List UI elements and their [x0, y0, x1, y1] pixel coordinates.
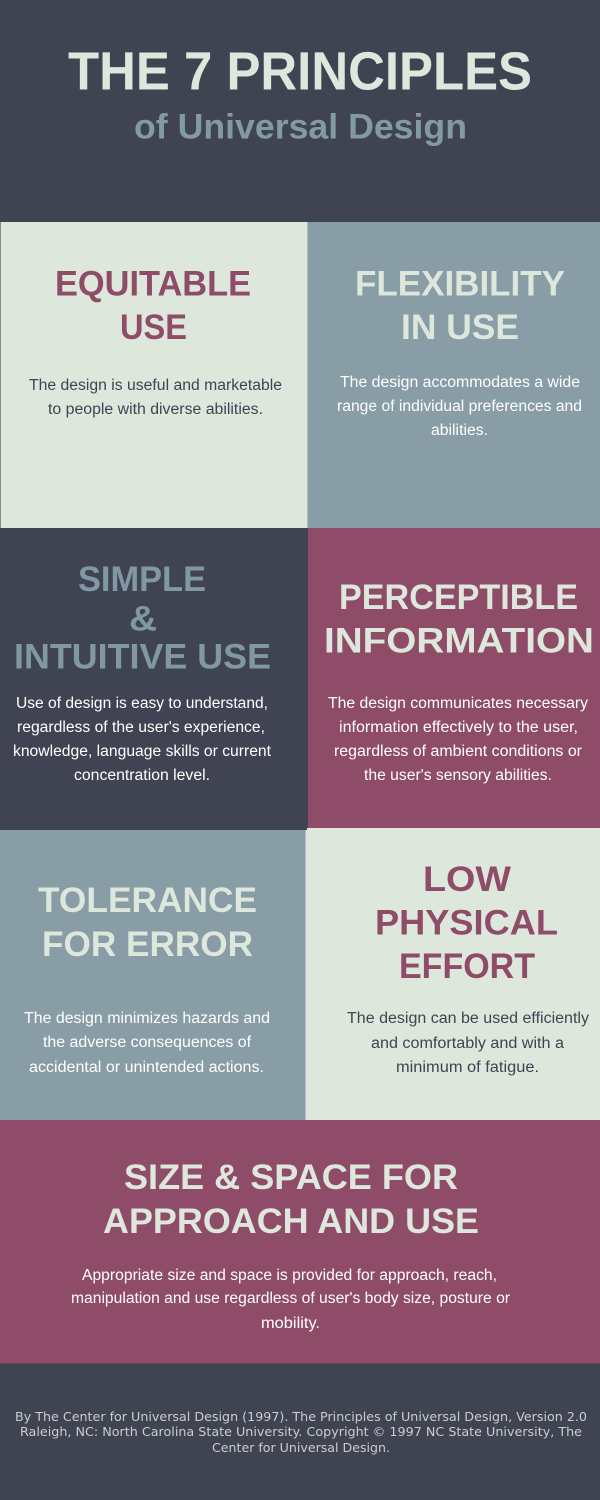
description: perceptible information: regardless of ambient conditions or	[334, 743, 582, 760]
description: size and space for approach and use: Appropriate size and space is provided for approach, reach,	[82, 1267, 497, 1284]
heading: simple and intuitive use: INTUITIVE USE	[14, 636, 271, 676]
heading: equitable use: EQUITABLE	[55, 264, 251, 304]
heading: flexibility in use: IN USE	[401, 307, 519, 347]
description: perceptible information: the user's sensory abilities.	[364, 767, 552, 784]
description: flexibility in use: abilities.	[431, 422, 488, 439]
description: simple and intuitive use: regardless of the user's experience,	[17, 719, 265, 736]
heading: tolerance for error	[38, 880, 257, 964]
heading: simple and intuitive use: SIMPLE	[78, 559, 206, 599]
heading: low physical effort	[375, 859, 558, 986]
description: tolerance for error: the adverse consequences of	[43, 1034, 252, 1051]
heading: flexibility in use: FLEXIBILITY	[355, 264, 565, 304]
panel: tolerance for error	[0, 830, 306, 1120]
description: tolerance for error: The design minimizes hazards and	[24, 1010, 270, 1027]
description: low physical effort: The design can be used efficiently	[347, 1010, 589, 1027]
description: simple and intuitive use: knowledge, language skills or current	[13, 743, 272, 760]
description: perceptible information: information effectively to the user,	[339, 719, 578, 736]
description: simple and intuitive use: Use of design is easy to understand,	[16, 695, 268, 712]
panel: perceptible information	[308, 528, 600, 828]
panel: simple and intuitive use	[0, 528, 308, 830]
heading: simple and intuitive use	[14, 559, 271, 676]
heading: simple and intuitive use: &	[129, 598, 157, 638]
description: size and space for approach and use: mobility.	[261, 1315, 320, 1332]
heading: equitable use	[55, 264, 251, 347]
description: flexibility in use: The design accommodates a wide	[340, 374, 580, 391]
description: simple and intuitive use: concentration level.	[74, 767, 210, 784]
description: tolerance for error	[24, 1010, 270, 1076]
description: simple and intuitive use	[13, 695, 272, 784]
description: low physical effort: minimum of fatigue.	[396, 1059, 539, 1076]
heading: flexibility in use	[355, 264, 565, 347]
description: flexibility in use	[337, 374, 582, 439]
footer citation: Center for Universal Design.	[212, 1440, 390, 1455]
description: flexibility in use: range of individual preferences and	[337, 398, 582, 415]
description: equitable use: The design is useful and marketable	[29, 377, 282, 394]
description: size and space for approach and use	[71, 1267, 510, 1332]
description: tolerance for error: accidental or unintended actions.	[29, 1059, 264, 1076]
subtitle: of Universal Design	[134, 108, 467, 146]
description: perceptible information	[328, 695, 588, 784]
heading: low physical effort: LOW	[423, 859, 512, 899]
description: equitable use: to people with diverse abilities.	[48, 401, 263, 418]
heading: low physical effort: EFFORT	[399, 946, 535, 986]
description: equitable use	[29, 377, 282, 418]
description: low physical effort: and comfortably and with a	[371, 1035, 564, 1052]
footer citation: By The Center for Universal Design (1997). The Principles of Universal Design, Version 2.0	[15, 1409, 587, 1424]
heading: size and space for approach and use: SIZE & SPACE FOR	[124, 1157, 458, 1197]
panel: low physical effort	[306, 828, 600, 1120]
heading: equitable use: USE	[120, 307, 187, 347]
panel: size and space for approach and use	[0, 1120, 600, 1364]
heading: low physical effort: PHYSICAL	[375, 902, 558, 942]
footer citation	[15, 1409, 587, 1455]
description: low physical effort	[347, 1010, 589, 1076]
main title: THE 7 PRINCIPLES	[68, 42, 532, 102]
heading: tolerance for error: FOR ERROR	[42, 924, 253, 964]
heading: size and space for approach and use: APPROACH AND USE	[103, 1201, 479, 1241]
footer citation: Raleigh, NC: North Carolina State University. Copyright © 1997 NC State University, The	[20, 1424, 582, 1439]
title block	[68, 42, 532, 146]
panel: equitable use	[0, 222, 308, 528]
heading: perceptible information: PERCEPTIBLE	[339, 577, 578, 617]
heading: perceptible information: INFORMATION	[324, 620, 594, 660]
heading: perceptible information	[324, 577, 594, 660]
heading: size and space for approach and use	[103, 1157, 479, 1241]
description: perceptible information: The design communicates necessary	[328, 695, 588, 712]
heading: tolerance for error: TOLERANCE	[38, 880, 257, 920]
panel: flexibility in use	[308, 222, 600, 528]
description: size and space for approach and use: manipulation and use regardless of user's body size, posture or	[71, 1290, 510, 1307]
